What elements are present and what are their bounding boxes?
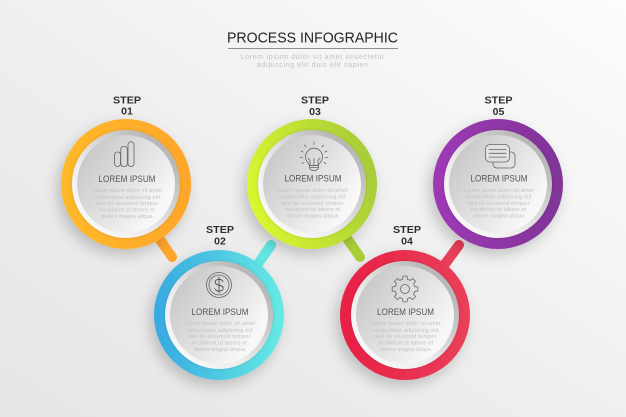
step 04 rim xyxy=(351,261,459,369)
step 04 body: incididunt ut labore et xyxy=(378,340,434,346)
step 01 rim xyxy=(72,130,180,238)
step 03 label: STEP xyxy=(301,94,329,106)
step 05 label xyxy=(484,94,512,118)
step 03 body: Lorem ipsum dolor sit amet xyxy=(278,188,348,194)
icon: bar chart xyxy=(114,142,134,166)
panel: step 02 xyxy=(154,224,284,380)
step 05 body: incididunt ut labore et xyxy=(471,207,526,213)
step 05 body: dolore magna aliqua xyxy=(473,214,524,220)
step 03 ring xyxy=(247,119,377,249)
step 04 label: 04 xyxy=(401,236,413,248)
step 04 body: sed do eiusmod tempor xyxy=(374,334,437,340)
step 05 heading: LOREM IPSUM xyxy=(470,174,528,184)
panel: step 03 xyxy=(247,94,377,257)
step 02 disc xyxy=(170,266,268,364)
step 02 label: 02 xyxy=(214,236,226,248)
step 05 ring xyxy=(433,119,563,249)
title block xyxy=(227,30,398,69)
step 03 label xyxy=(301,94,329,118)
step 04 heading: LOREM IPSUM xyxy=(377,307,434,317)
step 03 disc xyxy=(263,135,361,233)
panel: step 04 xyxy=(340,224,470,380)
step 01 body: sed do eiusmod tempor xyxy=(96,201,158,207)
step 01 disc xyxy=(77,135,175,233)
step 04 disc xyxy=(356,266,454,364)
step 03 body: dolore magna aliqua xyxy=(287,214,338,220)
step 02 heading: LOREM IPSUM xyxy=(192,307,248,317)
step 01 ring xyxy=(61,119,191,249)
step 05 body: Lorem ipsum dolor sit amet xyxy=(464,188,534,194)
step 01 label xyxy=(113,94,141,118)
step 05 label: STEP xyxy=(484,94,512,106)
step 01 body xyxy=(92,188,162,220)
icon: chat bubbles xyxy=(486,144,515,168)
step 02 handle xyxy=(258,245,271,264)
subtitle xyxy=(240,54,385,69)
step 01 body: dolore magna aliqua xyxy=(102,214,152,220)
step 04 body: Lorem ipsum dolor sit amet xyxy=(370,321,441,327)
step 03 heading: LOREM IPSUM xyxy=(284,174,342,184)
step 05 label: 05 xyxy=(493,106,504,118)
step 05 body: consectetur adipiscing elit xyxy=(466,194,532,200)
title: PROCESS INFOGRAPHIC xyxy=(227,30,398,46)
step 02 rim xyxy=(165,261,273,369)
step 01 body: consectetur adipiscing elit xyxy=(94,195,160,201)
step 03 rim xyxy=(258,130,366,238)
step 05 body xyxy=(464,188,534,220)
step 01 heading: LOREM IPSUM xyxy=(98,174,156,184)
step 04 body xyxy=(370,321,441,353)
step 02 ring xyxy=(154,250,284,380)
panel: step 05 xyxy=(433,94,563,249)
icon: dollar coin xyxy=(206,272,232,298)
subtitle: Lorem ipsum dolor sit amet onsectetur xyxy=(240,54,385,61)
step 05 disc xyxy=(449,135,547,233)
icon: gear xyxy=(392,276,418,302)
step 04 label xyxy=(393,224,421,248)
step 02 body: Lorem ipsum dolor sit amet xyxy=(184,321,255,327)
step 04 ring xyxy=(340,250,470,380)
step 02 body xyxy=(184,321,255,353)
step 02 label: STEP xyxy=(206,224,234,236)
step 04 body: dolore magna aliqua xyxy=(380,347,431,353)
step 02 label xyxy=(206,224,234,248)
step 03 body: consectetur adipiscing elit xyxy=(280,194,346,200)
subtitle: adipiscing elit duis elit sapien xyxy=(257,62,368,69)
step 02 body: dolore magna aliqua xyxy=(194,347,245,353)
step 05 rim xyxy=(444,130,552,238)
step 03 body: incididunt ut labore et xyxy=(285,207,340,213)
title underline xyxy=(228,48,398,49)
step 01 body: Lorem ipsum dolor sit amet xyxy=(92,188,162,194)
step 04 label: STEP xyxy=(393,224,421,236)
step 05 body: sed do eiusmod tempor xyxy=(468,201,530,207)
step 03 label: 03 xyxy=(309,106,321,118)
step 02 body: consectetur adipiscing elit xyxy=(186,328,253,334)
step 03 handle xyxy=(344,234,360,257)
step 01 body: incididunt ut labore et xyxy=(100,208,155,214)
panel: step 01 xyxy=(61,94,191,257)
icon: light bulb xyxy=(300,142,328,170)
step 01 label: STEP xyxy=(113,94,141,106)
step 01 handle xyxy=(156,234,172,257)
step 04 body: consectetur adipiscing elit xyxy=(372,328,439,334)
step 02 body: sed do eiusmod tempor xyxy=(188,334,251,340)
step 02 body: incididunt ut labore et xyxy=(192,340,248,346)
step 03 body xyxy=(278,188,348,220)
step 03 body: sed do eiusmod tempor xyxy=(282,201,344,207)
step 01 label: 01 xyxy=(121,106,133,118)
step 04 handle xyxy=(445,245,459,264)
